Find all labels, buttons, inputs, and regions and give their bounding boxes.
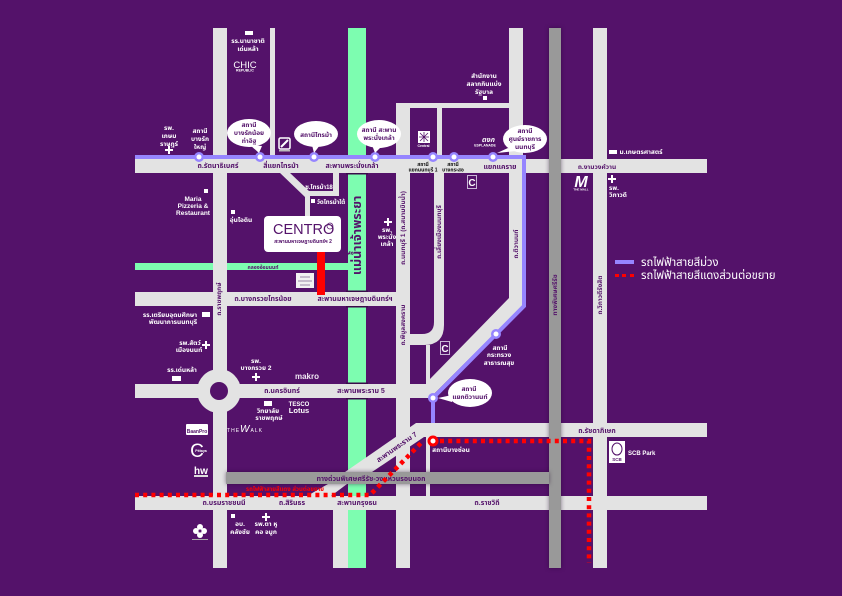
label: bang son station: สถานีบางซ่อน <box>432 446 470 454</box>
road labels horizontal: ถ.รัตนาธิเบศร์ <box>197 162 239 170</box>
label: kasemrad hospital: รพ. <box>164 125 174 132</box>
label: animal hospital: รพ.สัตว์ <box>179 339 201 347</box>
label: maria pizzeria <box>176 189 211 217</box>
label: ent hospital <box>255 513 278 536</box>
label: denla international school: รร.นานาชาติ <box>231 38 265 45</box>
logo: baan pro: BaanPro <box>187 429 207 435</box>
road labels horizontal: สะพานพระราม 5 <box>337 388 385 395</box>
road labels horizontal: แยกแคราย <box>483 164 517 171</box>
callout: government center <box>497 125 547 153</box>
road: rama 7 bridge diagonal: สะพานพระราม 7 <box>376 431 419 464</box>
label: vibhavadi hospital <box>608 175 627 199</box>
logo: c circle: Pittaya <box>195 449 207 453</box>
logo: flower <box>192 524 208 540</box>
label: krasuang satharanasuk: สาธารณสุข <box>484 360 514 368</box>
logo: tesco lotus: TESCO <box>289 402 310 408</box>
label: bang rak yai station <box>191 127 209 151</box>
road labels horizontal <box>197 160 616 508</box>
logo: tesco c lower <box>440 342 450 355</box>
canal: khlong om non <box>135 263 348 271</box>
callout: sai ma <box>294 121 338 153</box>
red line extension <box>135 441 589 563</box>
callout: bang rak noi tha it: ท่าอิฐ <box>242 137 257 145</box>
label: ratchaphruek college: วิทยาลัย <box>256 407 279 415</box>
label: vibhavadi hospital: วิภาวดี <box>609 191 627 199</box>
label: wat sai ma tai: วัดไทรม้าใต้ <box>317 199 345 206</box>
label: kasemrad hospital: ราษฎร์ <box>160 140 179 148</box>
label: denla school: รร.เด่นหล้า <box>167 366 197 374</box>
label: lottery office: รัฐบาล <box>475 88 493 96</box>
labels: bang krasor stations: บางกระสอ <box>442 168 464 174</box>
road labels horizontal: ถ.บรมราชชนนี <box>202 499 246 507</box>
icon: central logo: Central <box>417 144 430 148</box>
label: denla international school: เด่นหล้า <box>237 45 259 53</box>
road labels vertical <box>215 191 604 345</box>
red bar: centro access <box>317 250 325 295</box>
expressway: vertical <box>549 28 561 568</box>
roundabout <box>197 369 241 413</box>
callout: yaek tiwanon <box>438 379 492 407</box>
logo: tesco c: C <box>468 178 476 189</box>
label: aun ai din <box>230 210 252 225</box>
river: chao phraya: แม่น้ำเจ้าพระยา <box>348 196 364 275</box>
road labels horizontal: ถ.บางกรวยไทรน้อย <box>234 295 292 303</box>
logo: esplanade: ESPLANADE <box>474 144 496 148</box>
label: ratchaphruek college <box>255 401 283 422</box>
icon: central logo <box>417 131 430 148</box>
logo: baan pro <box>186 424 208 435</box>
label: triam udom school: พัฒนาการนนทบุรี <box>149 318 198 327</box>
label: CHIC republic: REPUBLIC <box>236 68 254 72</box>
road labels vertical: ถ.เลี่ยงเมืองนนทบุรี <box>434 204 444 259</box>
label: office: คลังชัย <box>230 528 250 536</box>
label: bang rak yai station: ใหญ่ <box>194 143 206 151</box>
label: lottery office <box>467 72 502 100</box>
label: maria pizzeria: Pizzeria & <box>178 203 209 210</box>
callout: yaek tiwanon: สถานี <box>461 385 477 393</box>
label: bang rak yai station: บางรัก <box>191 135 209 143</box>
expressway: horizontal <box>226 472 549 484</box>
road network <box>135 28 707 568</box>
expressway: vertical: ทางพิเศษศรีรัช <box>551 274 559 316</box>
road labels horizontal: ซ.ไทรม้า18 <box>305 184 333 191</box>
logo: esplanade <box>474 137 496 148</box>
callout: sai ma: สถานีไทรม้า <box>300 131 332 139</box>
station: bang son <box>429 437 437 445</box>
legend <box>615 256 776 282</box>
callout: bang rak noi tha it <box>227 119 271 153</box>
label: bang kruai hospital 2: รพ. <box>251 358 261 365</box>
label: phra nang klao hospital: เกล้า <box>380 240 394 248</box>
panel: centro logo: CENTRO <box>273 222 334 238</box>
road labels vertical: ถ.นนทบุรี 1 (ถ.สนามบินน้ำ) <box>398 191 408 265</box>
panel: centro logo: สะพานมหาเจษฎาบดินทร์ฯ 2 <box>274 239 332 245</box>
label: krasuang satharanasuk: สถานี <box>492 344 508 352</box>
logo: c circle: C <box>190 441 204 462</box>
label: ratchaphruek college: ราชพฤกษ์ <box>255 414 283 422</box>
purple line <box>135 157 524 423</box>
label: animal hospital <box>176 339 210 354</box>
river: chao phraya <box>346 28 368 568</box>
label: lottery office: สลากกินแบ่ง <box>467 80 502 88</box>
label: office: อบ. <box>235 521 245 528</box>
label: animal hospital: เมืองนนท์ <box>176 346 202 354</box>
legend: รถไฟฟ้าสายสีแดงส่วนต่อขยาย <box>641 269 776 282</box>
logo: hw: hw <box>194 466 208 477</box>
logo: the mall: M <box>574 174 588 191</box>
labels: bang krasor stations: สถานี <box>417 161 429 168</box>
expressway: horizontal: ทางด่วนพิเศษศรีรัช-วงแหวนรอบนอก <box>316 475 426 483</box>
label: phra nang klao hospital <box>378 218 396 248</box>
label: bang rak yai station: สถานี <box>192 127 208 135</box>
road labels horizontal: สะพานกรุงธน <box>337 500 377 508</box>
logo: tesco lotus <box>289 402 310 415</box>
logo: scb park: SCB <box>612 457 622 462</box>
label: bang kruai hospital 2 <box>241 358 272 381</box>
logo: scb park <box>609 441 656 463</box>
label: phra nang klao hospital: พระนั่ง <box>378 232 396 241</box>
callout: phra nang klao bridge <box>357 120 401 153</box>
road labels vertical: ถ.ราชพฤกษ์ <box>215 282 223 316</box>
callout: bang rak noi tha it: บางรักน้อย <box>234 129 264 137</box>
road labels horizontal: ถ.นครอินทร์ <box>264 387 300 395</box>
stations on purple line <box>194 152 501 403</box>
logo: the mall: THE MALL <box>573 188 589 192</box>
road labels horizontal: สะพานพระนั่งเกล้า <box>325 160 379 170</box>
label: denla school <box>167 366 197 381</box>
road labels horizontal: ถ.งามวงศ์วาน <box>578 163 616 171</box>
road labels horizontal: ถ.ราชวิถี <box>474 499 500 507</box>
label: triam udom school: รร.เตรียมอุดมศึกษา <box>143 311 197 320</box>
logo: tesco lotus: Lotus <box>289 406 309 415</box>
label: ent hospital: คอ จมูก <box>255 529 277 536</box>
panel: centro logo <box>264 216 341 252</box>
callout: phra nang klao bridge: สถานี สะพาน <box>362 126 396 134</box>
label: triam udom school <box>143 311 210 327</box>
label: CHIC republic: CHIC <box>233 60 257 71</box>
label: krasuang satharanasuk <box>484 344 514 368</box>
label: lottery office: สำนักงาน <box>471 72 497 80</box>
road labels vertical: ถ.ติวานนท์ <box>512 230 520 258</box>
road labels horizontal: ถ.สิรินธร <box>279 500 305 507</box>
callout: yaek tiwanon: แยกติวานนท์ <box>452 393 488 401</box>
callout: government center: ศูนย์ราชการ <box>509 135 542 143</box>
labels: bang krasor stations: สถานี <box>447 161 459 168</box>
label: office <box>230 514 250 536</box>
label: maria pizzeria: Restaurant <box>176 210 211 217</box>
road labels vertical: ถ.พิบูลสงคราม <box>400 305 407 345</box>
road labels vertical: ถ.วิภาวดีรังสิต <box>596 276 604 314</box>
label: kasetsart university: ม.เกษตรศาสตร์ <box>620 148 663 156</box>
label: bang kruai hospital 2: บางกรวย 2 <box>241 365 272 372</box>
logo: esplanade: ตงก <box>482 137 495 144</box>
label: denla international school <box>231 31 265 53</box>
label: kasemrad hospital: เกษม <box>162 133 176 140</box>
label: kasetsart university <box>609 148 663 156</box>
label: ent hospital: รพ.ตา หู <box>255 521 278 528</box>
label: phra nang klao hospital: รพ. <box>382 227 392 234</box>
road labels horizontal: สะพานมหาเจษฎาบดินทร์ฯ <box>317 295 393 303</box>
callout: government center: สถานี <box>517 127 533 135</box>
logo: scb park: SCB Park <box>628 451 656 457</box>
label: maria pizzeria: Maria <box>185 196 202 203</box>
label: krasuang satharanasuk: กระทรวง <box>487 352 511 359</box>
callout: phra nang klao bridge: พระนั่งเกล้า <box>363 133 395 142</box>
icon: white logo box <box>296 273 314 288</box>
label: kasemrad hospital <box>160 125 179 154</box>
canal: khlong om non: คลองอ้อมนนท์ <box>248 264 278 271</box>
road labels horizontal: ถ.รัชดาภิเษก <box>578 427 616 435</box>
road labels horizontal: สี่แยกไทรม้า <box>263 160 299 170</box>
logo: makro: makro <box>295 372 319 381</box>
road: rama 7 bridge diagonal <box>345 423 424 472</box>
logo: tesco c <box>468 176 476 189</box>
callout: government center: นนทบุรี <box>515 143 536 152</box>
labels: bang krasor stations: แยกนนทบุรี 1 <box>409 166 438 174</box>
logo: the walk: THEWALK <box>227 424 263 435</box>
label: red line extension: รถไฟฟ้าสายสีแดง ส่วนต่อขยาย <box>246 485 324 493</box>
logo: tesco c lower: C <box>441 344 449 355</box>
label: aun ai din: อุ่นไอดิน <box>230 216 252 225</box>
legend: รถไฟฟ้าสายสีม่วง <box>641 256 719 269</box>
labels: bang krasor stations <box>409 161 464 174</box>
callout: bang rak noi tha it: สถานี <box>241 121 257 129</box>
icon: sai ma logo <box>279 138 290 152</box>
label: vibhavadi hospital: รพ. <box>609 185 619 192</box>
